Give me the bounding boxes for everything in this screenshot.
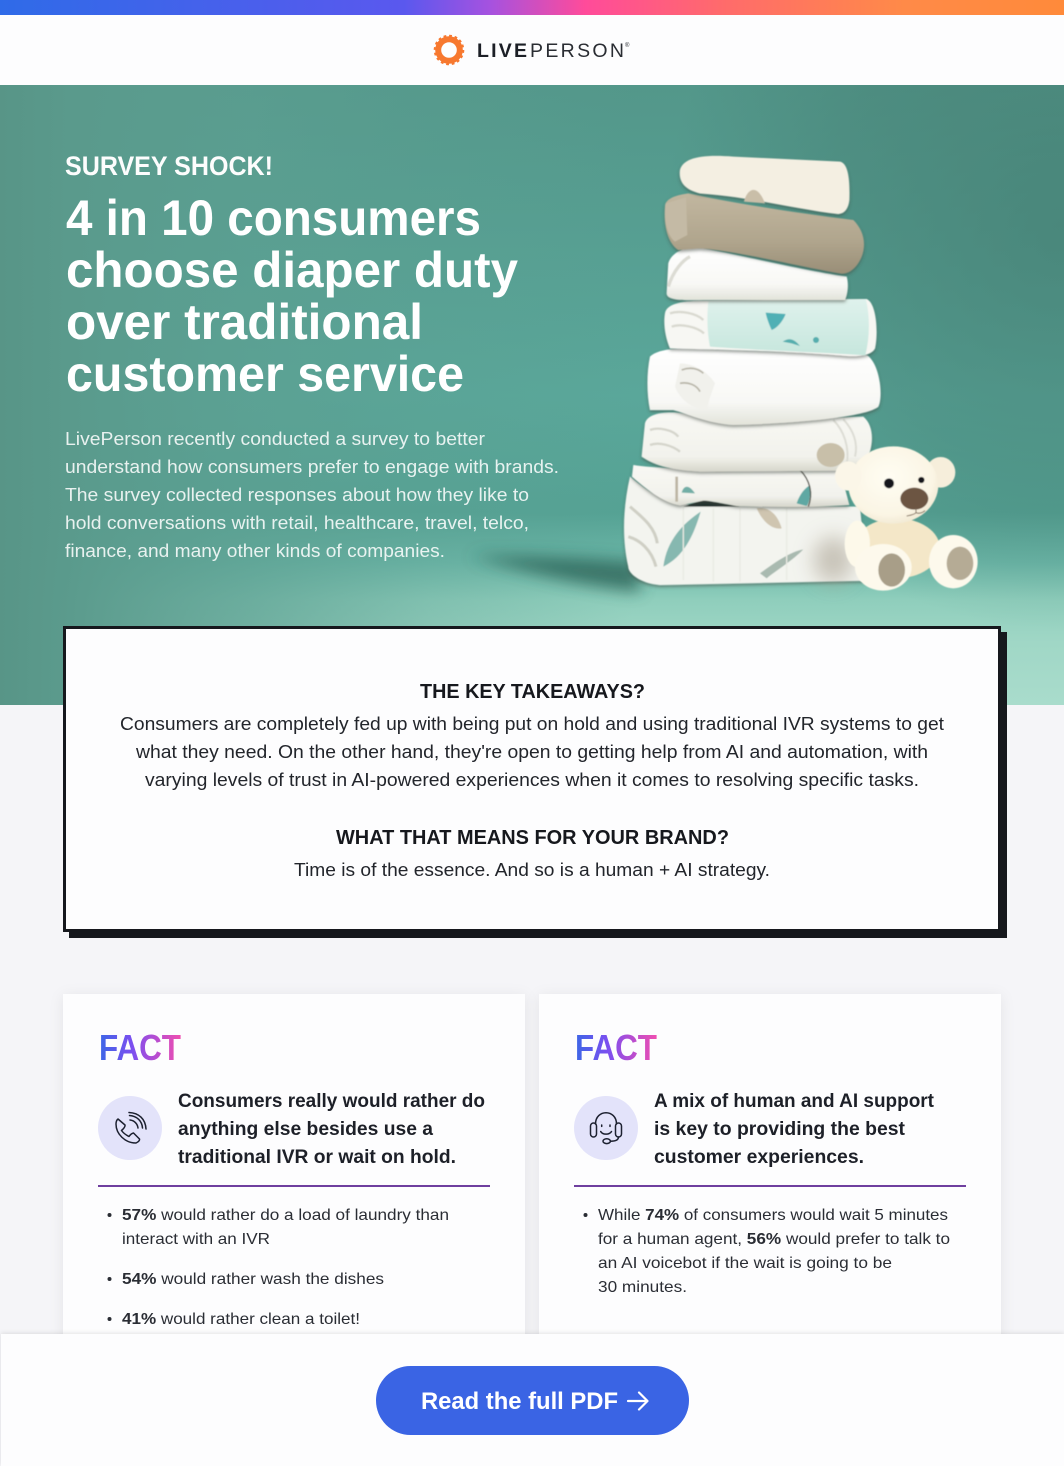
hero headline: customer service	[66, 346, 464, 402]
icon: headset agent	[574, 1096, 638, 1160]
floor shadow	[470, 556, 640, 592]
bullet list: 54% would rather wash the dishes	[122, 1271, 384, 1288]
button: read the full PDF: Read the full PDF	[421, 1388, 618, 1415]
bottom roll	[624, 477, 867, 585]
hero headline: 4 in 10 consumers	[66, 190, 481, 246]
icon: phone with signal	[98, 1096, 162, 1160]
bullet list: 57% would rather do a load of laundry than	[122, 1207, 449, 1224]
divider	[574, 1185, 966, 1187]
takeaways text	[120, 714, 944, 790]
fact statement	[178, 1091, 485, 1168]
takeaways text: varying levels of trust in AI-powered experiences when it comes to resolving specific tasks.	[145, 770, 919, 790]
hero panel	[0, 85, 1064, 705]
roll 3	[667, 247, 848, 300]
logo: LivePerson	[435, 36, 630, 64]
bullet list	[108, 1207, 449, 1328]
hero headline: over traditional	[66, 294, 423, 350]
takeaways text: what they need. On the other hand, they're open to getting help from AI and automation, with	[135, 742, 928, 762]
hero description: The survey collected responses about how they like to	[65, 485, 529, 505]
heading: the key takeaways: THE KEY TAKEAWAYS?	[420, 680, 645, 703]
panel: fact card right	[539, 994, 1001, 1354]
roll 5	[647, 349, 881, 425]
brand text: Time is of the essence. And so is a human + AI strategy.	[294, 860, 770, 880]
panel: key takeaways	[64, 628, 1007, 938]
logo: LivePerson: LIVE	[477, 40, 527, 62]
hero description	[65, 429, 559, 561]
top gradient bar	[0, 0, 1064, 15]
icon: arrow	[628, 1392, 648, 1410]
bullet text: for a human agent, 56% would prefer to talk to	[598, 1231, 950, 1248]
heading: what that means: WHAT THAT MEANS FOR YOUR BRAND?	[336, 826, 729, 849]
fact statement	[654, 1091, 935, 1168]
hero headline	[66, 190, 518, 402]
fact statement: customer experiences.	[654, 1147, 864, 1168]
footer bar	[1, 1334, 1064, 1466]
hero headline: choose diaper duty	[66, 242, 518, 298]
fact statement: Consumers really would rather do	[178, 1091, 485, 1112]
hero description: LivePerson recently conducted a survey to better	[65, 429, 485, 449]
fact statement: A mix of human and AI support	[654, 1091, 935, 1112]
bullet text: 30 minutes.	[598, 1279, 687, 1296]
hero description: finance, and many other kinds of companies.	[65, 541, 445, 561]
panel: fact card left	[63, 994, 525, 1354]
bullet list: 41% would rather clean a toilet!	[122, 1311, 360, 1328]
button: read the full PDF	[376, 1366, 689, 1435]
bullet list: interact with an IVR	[122, 1231, 270, 1248]
logo: LivePerson: PERSON	[530, 40, 624, 62]
logo: LivePerson: ®	[625, 42, 630, 49]
takeaways text: Consumers are completely fed up with being put on hold and using traditional IVR systems to get	[120, 714, 944, 734]
roll 6	[642, 413, 872, 472]
fact statement: traditional IVR or wait on hold.	[178, 1147, 456, 1168]
hero eyebrow: SURVEY SHOCK!	[65, 151, 273, 181]
bullet text	[584, 1207, 950, 1296]
bullet text: While 74% of consumers would wait 5 minutes	[598, 1207, 948, 1224]
bullet text: an AI voicebot if the wait is going to be	[598, 1255, 892, 1272]
header	[0, 15, 1064, 85]
hero description: understand how consumers prefer to engage with brands.	[65, 457, 559, 477]
illustration: stack of diapers and teddy bear	[624, 156, 978, 591]
roll 4	[664, 299, 877, 356]
divider	[98, 1185, 490, 1187]
fact statement: is key to providing the best	[654, 1119, 906, 1140]
fact heading: FACT	[575, 1027, 657, 1068]
fact statement: anything else besides use a	[178, 1119, 433, 1140]
roll 7	[632, 465, 849, 507]
fact heading: FACT	[99, 1027, 181, 1068]
roll 2	[665, 193, 864, 274]
hero description: hold conversations with retail, healthcare, travel, telco,	[65, 513, 529, 533]
roll 1	[680, 156, 849, 214]
